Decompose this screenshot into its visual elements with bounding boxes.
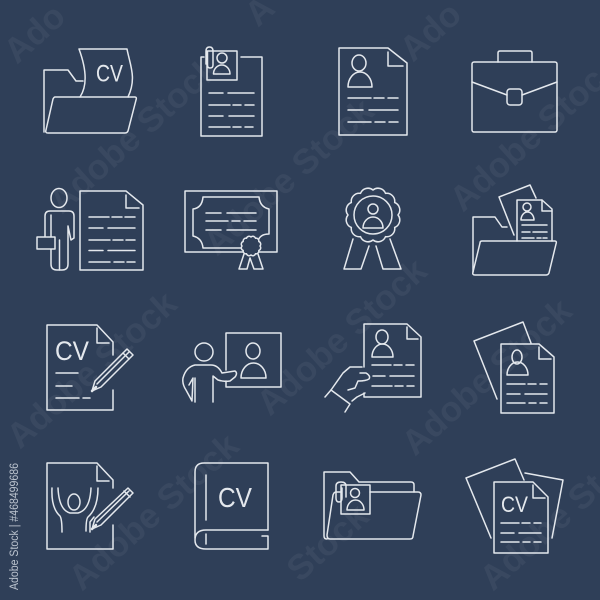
icon: folder with CV page: [44, 49, 136, 133]
icon: resume with clipped photo: [201, 47, 262, 136]
icon: stacked CV documents: CV: [501, 492, 528, 517]
icon: document with raised-arms figure and pencil: [47, 463, 133, 549]
icon: stacked CV documents: [466, 459, 563, 553]
watermarks: Adobe Stock: [41, 48, 227, 221]
credit text: Adobe Stock | #468499686: [9, 463, 21, 590]
icon: CV document with pencil: [47, 325, 133, 410]
icon: stacked resumes: [474, 322, 554, 413]
icon: briefcase: [472, 51, 557, 132]
icon: CV document with pencil: CV: [55, 336, 89, 366]
icon: resume document: [339, 48, 407, 135]
icon: folder with resumes: [473, 185, 556, 275]
icon: certificate with seal: [185, 191, 277, 269]
icon: folder with clipped photo: [324, 472, 421, 539]
watermarks: Adobe Stock: [61, 425, 247, 598]
watermarks: Adobe Stock: [196, 90, 382, 263]
icon: folder with CV page: CV: [96, 60, 123, 88]
icon: hand holding resume: [325, 324, 421, 412]
watermarks: Stock: [279, 496, 377, 589]
icon: person beside document: [37, 188, 143, 270]
watermarks: Adobe Stock: [0, 283, 185, 456]
icon: presenter at board: [183, 333, 281, 402]
icon: CV book: [195, 463, 268, 549]
watermarks: Adobe Stock: [249, 250, 435, 423]
watermarks: Adobe Stock: [394, 290, 580, 463]
icon: CV book: CV: [218, 482, 252, 513]
icon: rosette award with person: [344, 188, 401, 269]
